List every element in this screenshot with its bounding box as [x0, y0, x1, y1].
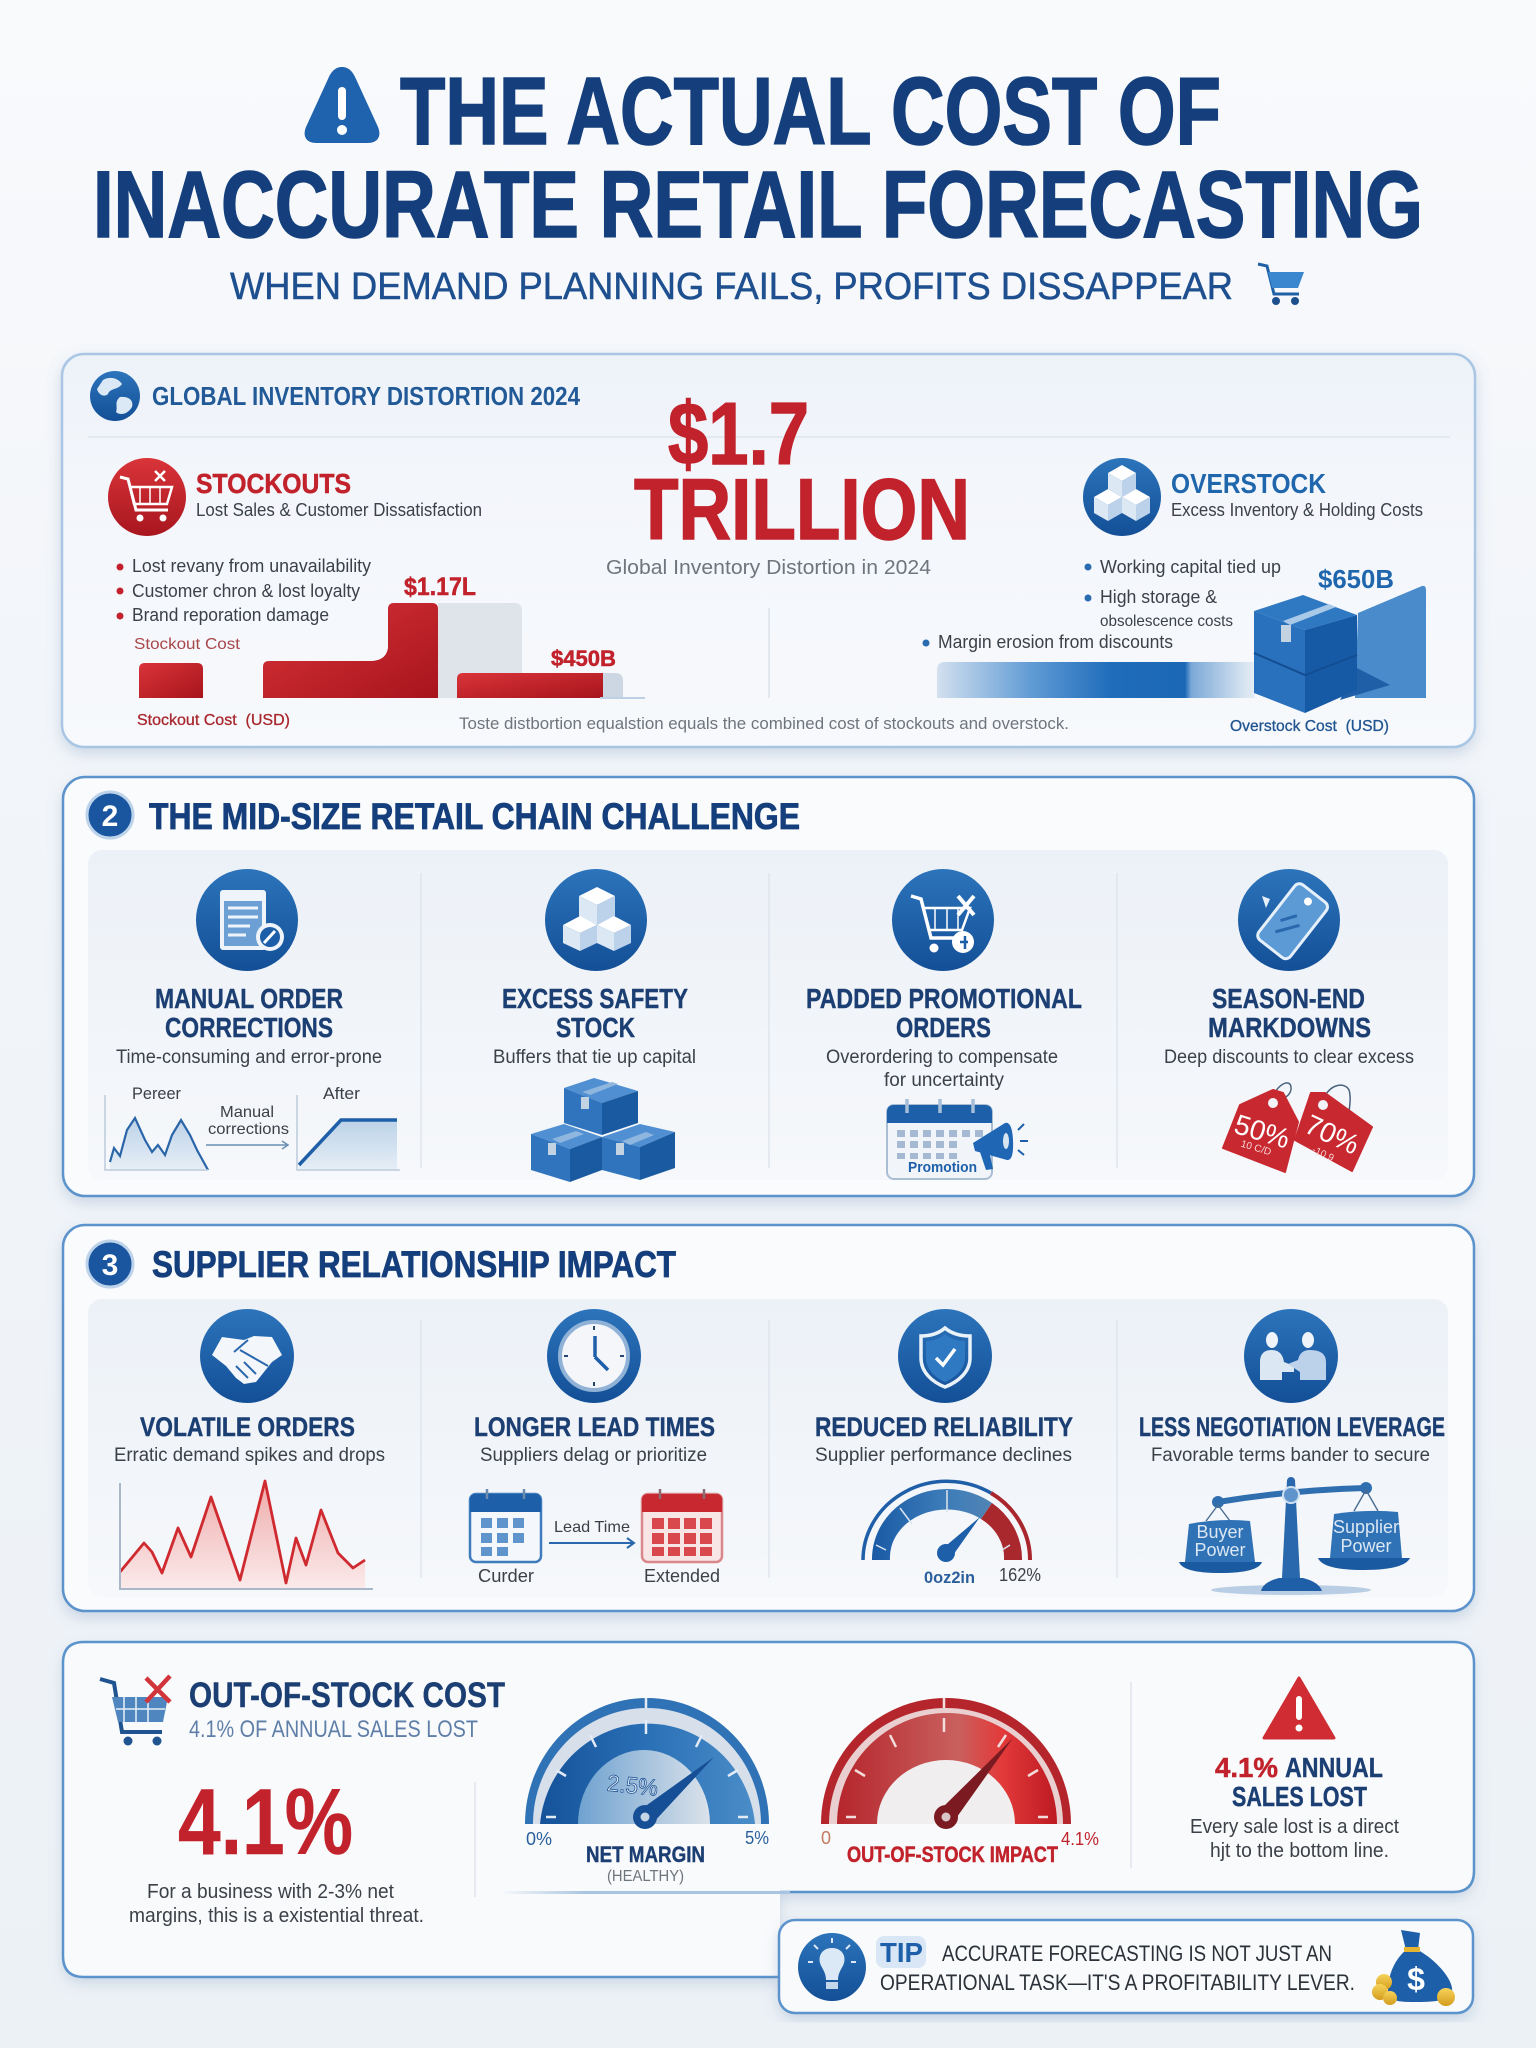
heading: stockouts: STOCKOUTS — [196, 468, 351, 499]
gauge: out-of-stock impact: 4.1% — [1061, 1829, 1099, 1849]
illustration: lead time calendars — [470, 1489, 722, 1586]
illustration: lead time calendars: Lead Time — [554, 1519, 630, 1536]
illustration: stacked boxes — [531, 1078, 675, 1182]
label: tip: TIP — [880, 1937, 923, 1968]
caption: global distortion: Global Inventory Distortion in 2024 — [606, 557, 931, 579]
heading: mid-size retail chain challenge: THE MID-SIZE RETAIL CHAIN CHALLENGE — [149, 796, 800, 837]
chart: erratic demand line — [120, 1481, 373, 1589]
chart: overstock bar and box — [937, 564, 1426, 713]
description: for uncertainty — [884, 1070, 1004, 1091]
column: reduced reliability — [815, 1309, 1073, 1587]
icon: cart with red cross — [100, 1676, 170, 1746]
column: excess safety stock — [493, 869, 696, 1182]
icon: stockouts cart — [108, 458, 186, 536]
chart: before and after: Pereer — [132, 1084, 181, 1103]
heading: overstock: OVERSTOCK — [1171, 468, 1326, 499]
gauge: reliability: 0oz2in — [924, 1568, 975, 1587]
callout: tip — [779, 1920, 1473, 2013]
icon: negotiating people — [1244, 1309, 1338, 1403]
text: tip message — [880, 1941, 1355, 1995]
subheading: 4.1% OF ANNUAL SALES LOST — [189, 1716, 478, 1743]
title: season-end markdowns: MARKDOWNS — [1208, 1012, 1371, 1043]
panel: supplier relationship impact — [63, 1225, 1474, 1611]
column: season-end markdowns — [1164, 869, 1414, 1172]
description: Buffers that tie up capital — [493, 1047, 696, 1068]
column: padded promotional orders — [806, 869, 1082, 1179]
big number: 1.7 trillion: TRILLION — [634, 462, 970, 558]
column: manual order corrections — [105, 869, 400, 1170]
panel: mid-size retail chain challenge — [63, 777, 1474, 1196]
icon: light bulb — [798, 1933, 866, 2001]
text: tip message: OPERATIONAL TASK—IT'S A PROFITABILITY LEVER. — [880, 1970, 1355, 1995]
icon: clock — [547, 1309, 641, 1403]
text: margin threat — [129, 1881, 424, 1927]
title: padded promotional orders — [806, 983, 1082, 1043]
gauge: out-of-stock impact: OUT-OF-STOCK IMPACT — [847, 1842, 1058, 1867]
callout: annual sales lost: SALES LOST — [1232, 1781, 1367, 1812]
gauge: net margin: 5% — [745, 1828, 769, 1848]
callout: annual sales lost: 4.1% — [1215, 1752, 1278, 1783]
title block — [93, 58, 1423, 308]
description: Erratic demand spikes and drops — [114, 1445, 385, 1466]
axis label: stockout cost: Stockout Cost (USD) — [137, 712, 290, 729]
title: padded promotional orders: ORDERS — [896, 1012, 991, 1043]
illustration: balance scale: Power — [1340, 1536, 1392, 1556]
illustration: discount tags: 50% — [1231, 1109, 1293, 1155]
subtitle: WHEN DEMAND PLANNING FAILS, PROFITS DISSAPPEAR — [230, 266, 1233, 308]
illustration: discount tags — [1223, 1083, 1372, 1172]
description: Suppliers delag or prioritize — [480, 1445, 707, 1466]
title: manual order corrections — [155, 983, 343, 1043]
big number: 1.7 trillion: $1.7 — [668, 384, 809, 483]
text: tip message: ACCURATE FORECASTING IS NOT JUST AN — [942, 1941, 1332, 1966]
title: excess safety stock: EXCESS SAFETY — [502, 983, 688, 1014]
illustration: balance scale: Supplier — [1333, 1517, 1399, 1537]
description: Overordering to compensate — [826, 1047, 1058, 1068]
list: stockout effects: Customer chron & lost loyalty — [132, 581, 360, 601]
illustration: promotion calendar: Promotion — [908, 1159, 977, 1176]
chart: before and after — [105, 1084, 400, 1170]
illustration: discount tags: -10 9 — [1310, 1145, 1336, 1164]
title: padded promotional orders: PADDED PROMOTIONAL — [806, 983, 1082, 1014]
gauge: net margin: NET MARGIN — [586, 1842, 705, 1867]
illustration: lead time calendars: Curder — [478, 1566, 534, 1586]
gauge: net margin: 0% — [526, 1829, 552, 1849]
icon: money bag: $ — [1407, 1961, 1425, 1997]
gauge: out-of-stock impact: 0 — [821, 1828, 831, 1848]
title: longer lead times: LONGER LEAD TIMES — [474, 1412, 715, 1442]
panel: out-of-stock cost — [63, 1642, 1474, 1977]
text: overstock subtitle: Excess Inventory & Holding Costs — [1171, 500, 1423, 520]
badge: number 3 — [87, 1241, 133, 1287]
gauge: reliability — [863, 1481, 1041, 1587]
axis label: overstock cost: Overstock Cost (USD) — [1230, 718, 1389, 735]
list: overstock effects: High storage & — [1100, 587, 1217, 607]
callout: annual sales lost: ANNUAL — [1285, 1752, 1383, 1783]
title: season-end markdowns — [1208, 983, 1371, 1043]
column: longer lead times — [470, 1309, 722, 1586]
description: Time-consuming and error-prone — [116, 1047, 382, 1068]
list: stockout effects: Brand reporation damage — [132, 605, 329, 625]
icon: overstock cubes — [1083, 458, 1161, 536]
title: season-end markdowns: SEASON-END — [1212, 983, 1365, 1014]
list: stockout effects — [116, 556, 371, 625]
list: overstock effects: obsolescence costs — [1100, 613, 1233, 630]
heading: out-of-stock cost: OUT-OF-STOCK COST — [189, 1676, 505, 1715]
chart: stockout cost bars: Stockout Cost — [134, 636, 241, 653]
list: overstock effects — [922, 557, 1281, 652]
callout: annual sales lost — [1190, 1752, 1399, 1862]
text: margin threat: margins, this is a existential threat. — [129, 1905, 424, 1927]
icon: handshake — [200, 1309, 294, 1403]
chart: stockout cost bars — [134, 573, 645, 698]
panel: global inventory distortion — [62, 354, 1475, 747]
icon: safety stock cubes — [545, 869, 647, 971]
list: overstock effects: Margin erosion from discounts — [938, 632, 1173, 652]
title: manual order corrections: CORRECTIONS — [165, 1012, 333, 1043]
illustration: balance scale — [1179, 1477, 1410, 1595]
description: Supplier performance declines — [815, 1445, 1072, 1466]
illustration: promotion calendar — [887, 1099, 1028, 1179]
badge: number 2: 2 — [102, 800, 118, 833]
callout: annual sales lost: Every sale lost is a direct — [1190, 1816, 1399, 1838]
badge: number 2 — [87, 792, 133, 838]
gauge: net margin: 2.5% — [606, 1770, 659, 1801]
icon: globe — [90, 371, 140, 421]
illustration: balance scale: Power — [1194, 1540, 1246, 1560]
gauge: net margin — [525, 1698, 769, 1885]
gauge: reliability: 162% — [999, 1565, 1041, 1585]
description: Favorable terms bander to secure — [1151, 1445, 1430, 1466]
gauge: out-of-stock impact — [821, 1698, 1099, 1867]
title: manual order corrections: MANUAL ORDER — [155, 983, 343, 1014]
icon: shopping cart — [1258, 264, 1304, 305]
chart: before and after: Manual — [220, 1104, 274, 1121]
title: volatile orders: VOLATILE ORDERS — [140, 1412, 355, 1442]
text: stockouts subtitle: Lost Sales & Customer Dissatisfaction — [196, 500, 482, 520]
icon: money bag — [1372, 1930, 1455, 2006]
description: Deep discounts to clear excess — [1164, 1047, 1414, 1068]
icon: price tag — [1238, 869, 1340, 971]
chart: before and after: corrections — [208, 1121, 289, 1138]
icon: order document — [196, 869, 298, 971]
title: excess safety stock — [502, 983, 688, 1043]
title: excess safety stock: STOCK — [556, 1012, 635, 1043]
heading: supplier relationship impact: SUPPLIER RELATIONSHIP IMPACT — [152, 1244, 676, 1285]
chart: overstock bar and box: $650B — [1318, 564, 1394, 594]
gauge: net margin: (HEALTHY) — [607, 1868, 684, 1885]
description — [826, 1047, 1058, 1091]
icon: warning triangle — [305, 67, 379, 143]
heading: global inventory distortion: GLOBAL INVENTORY DISTORTION 2024 — [152, 381, 580, 411]
icon: cart with cross — [892, 869, 994, 971]
big number: 1.7 trillion — [634, 384, 970, 558]
chart: stockout cost bars: $1.17L — [404, 573, 476, 601]
footnote: Toste distbortion equalstion equals the combined cost of stockouts and overstock. — [459, 714, 1069, 733]
illustration: discount tags: 10 C/D — [1239, 1139, 1272, 1158]
callout: annual sales lost: hjt to the bottom line. — [1210, 1840, 1389, 1862]
title: reduced reliability: REDUCED RELIABILITY — [815, 1412, 1073, 1442]
column: volatile orders — [114, 1309, 385, 1589]
list: stockout effects: Lost revany from unavailability — [132, 556, 371, 576]
big number: 4.1%: 4.1% — [178, 1769, 353, 1874]
list: overstock effects: Working capital tied up — [1100, 557, 1281, 577]
illustration: discount tags: 70% — [1300, 1109, 1364, 1160]
column: less negotiation leverage — [1139, 1309, 1445, 1595]
chart: stockout cost bars: $450B — [551, 646, 616, 671]
icon: red warning triangle — [1264, 1678, 1334, 1738]
badge: number 3: 3 — [102, 1249, 118, 1282]
title line 1: THE ACTUAL COST OF — [400, 58, 1221, 165]
text: margin threat: For a business with 2-3% net — [147, 1881, 394, 1903]
illustration: balance scale: Buyer — [1196, 1522, 1244, 1542]
icon: shield — [898, 1309, 992, 1403]
chart: before and after: After — [323, 1084, 360, 1103]
illustration: lead time calendars: Extended — [644, 1566, 720, 1586]
